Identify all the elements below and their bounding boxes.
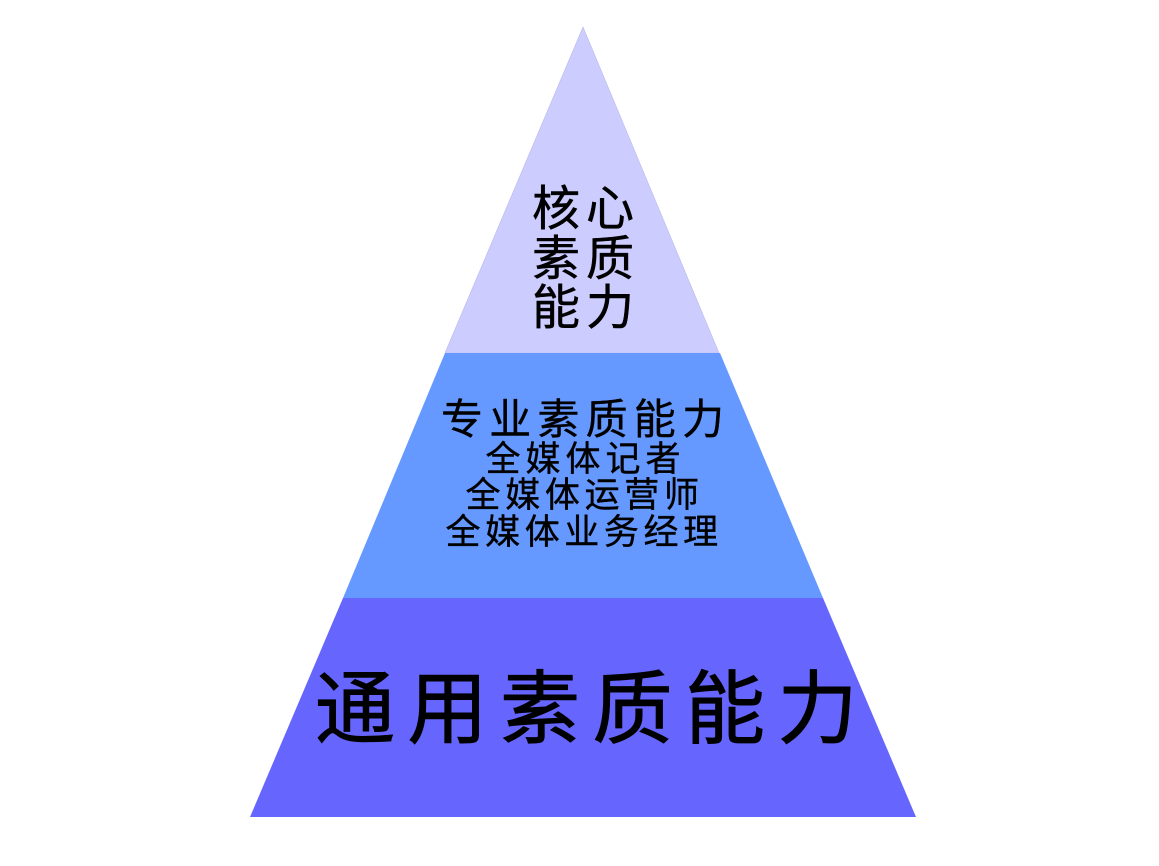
text: core competence: 核 <box>532 183 580 236</box>
text: general competence: 通用素质能力 <box>315 665 870 754</box>
text: core competence <box>532 183 634 335</box>
text: core competence: 质 <box>586 233 634 286</box>
panel: core competence tier <box>445 27 719 353</box>
text: all-media reporter: 全媒体记者 <box>486 440 686 479</box>
text: core competence: 素 <box>532 233 580 286</box>
text: core competence: 能 <box>532 282 580 335</box>
text: professional competence heading: 专业素质能力 <box>441 396 730 443</box>
panel: general competence tier <box>250 598 916 817</box>
panel: professional competence tier <box>343 353 823 598</box>
text: core competence: 心 <box>586 183 634 236</box>
text: all-media business manager: 全媒体业务经理 <box>446 513 723 552</box>
text: all-media operator: 全媒体运营师 <box>466 476 704 515</box>
text: core competence: 力 <box>586 282 634 335</box>
